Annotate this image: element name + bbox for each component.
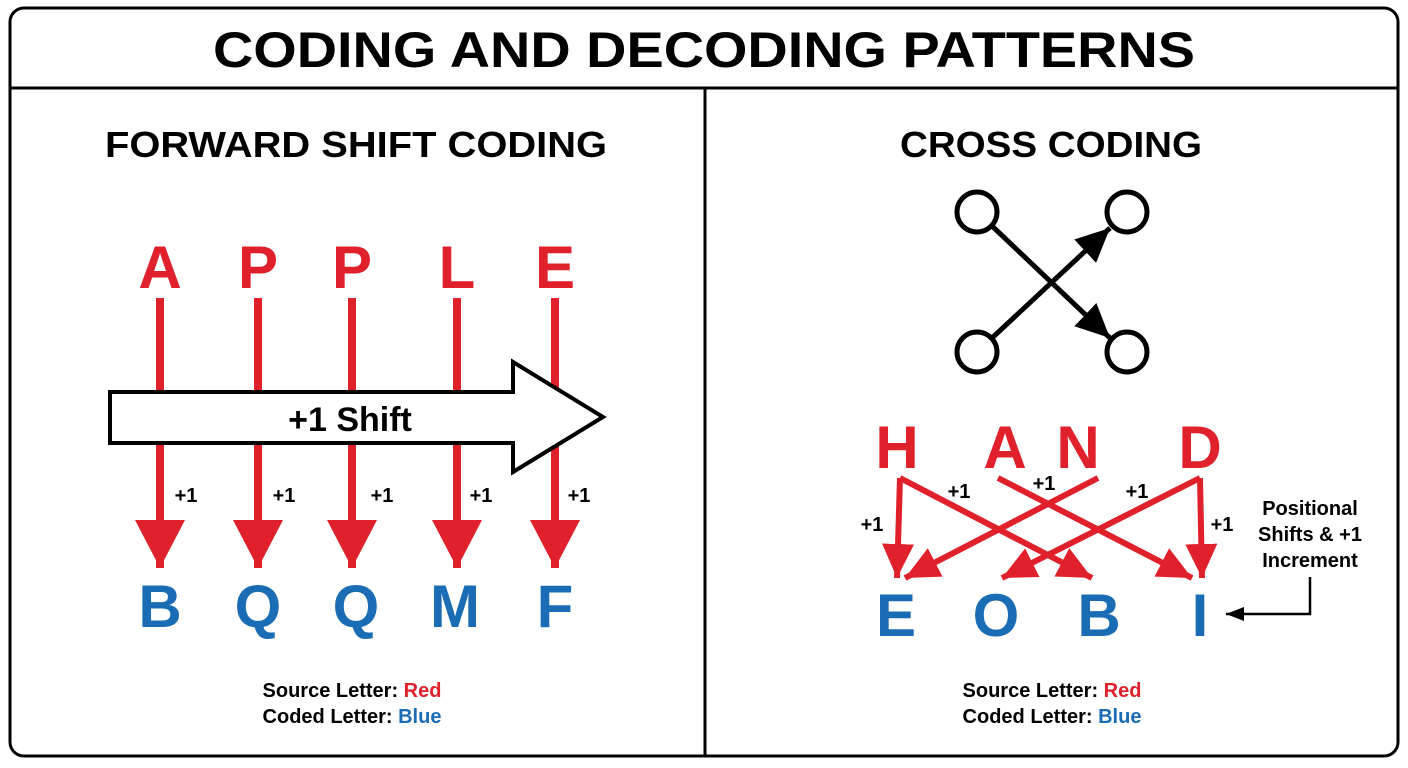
coded letters EOBI: E (876, 582, 916, 649)
source letters HAND (875, 414, 1222, 481)
legend right: Source Letter: Red (963, 680, 1141, 702)
+1 labels cross: +1 (1126, 481, 1148, 503)
+1 labels cross (861, 473, 1233, 536)
+1 labels cross: +1 (861, 514, 883, 536)
heading: forward shift coding: FORWARD SHIFT CODING (105, 124, 607, 165)
source letters APPLE (138, 234, 575, 301)
callout: positional shifts: Increment (1262, 550, 1358, 572)
panel: cross coding (861, 124, 1362, 728)
source letters HAND: H (875, 414, 919, 481)
icon: cross diagram (957, 192, 1147, 372)
legend left: Coded Letter: Blue (263, 706, 441, 728)
title: CODING AND DECODING PATTERNS (213, 22, 1195, 78)
source letters HAND: D (1178, 414, 1222, 481)
callout: positional shifts: Positional (1262, 498, 1358, 520)
panel: forward shift coding (105, 124, 607, 728)
legend right (963, 680, 1141, 728)
+1 labels cross: +1 (1033, 473, 1055, 495)
+1 labels: +1 (175, 485, 197, 507)
coded letters BQQMF: F (537, 573, 573, 640)
coded letters BQQMF: Q (235, 573, 281, 640)
source letters HAND: N (1056, 414, 1100, 481)
+1 labels: +1 (568, 485, 590, 507)
coded letters BQQMF: M (430, 573, 480, 640)
callout: positional shifts (1226, 498, 1362, 614)
coded letters BQQMF (138, 573, 573, 640)
big shift arrow (110, 362, 603, 472)
+1 labels (175, 485, 590, 507)
legend right: Coded Letter: Blue (963, 706, 1141, 728)
source letters HAND: A (983, 414, 1027, 481)
coded letters EOBI: B (1077, 582, 1121, 649)
cross arrows (897, 478, 1202, 578)
source letters APPLE: A (138, 234, 182, 301)
source letters APPLE: P (332, 234, 372, 301)
coded letters BQQMF: Q (333, 573, 379, 640)
heading: cross coding: CROSS CODING (900, 124, 1202, 165)
+1 labels: +1 (470, 485, 492, 507)
legend left (263, 680, 441, 728)
source letters APPLE: P (238, 234, 278, 301)
legend left: Source Letter: Red (263, 680, 441, 702)
coded letters EOBI: I (1192, 582, 1208, 649)
source letters APPLE: L (439, 234, 475, 301)
coded letters EOBI (876, 582, 1208, 649)
source letters APPLE: E (535, 234, 575, 301)
+1 labels: +1 (273, 485, 295, 507)
callout: positional shifts: Shifts & +1 (1258, 524, 1362, 546)
+1 labels cross: +1 (948, 481, 970, 503)
coded letters BQQMF: B (138, 573, 182, 640)
coded letters EOBI: O (973, 582, 1019, 649)
+1 labels cross: +1 (1211, 514, 1233, 536)
+1 labels: +1 (371, 485, 393, 507)
red down arrows (160, 298, 555, 568)
big shift arrow: +1 Shift (288, 401, 412, 439)
